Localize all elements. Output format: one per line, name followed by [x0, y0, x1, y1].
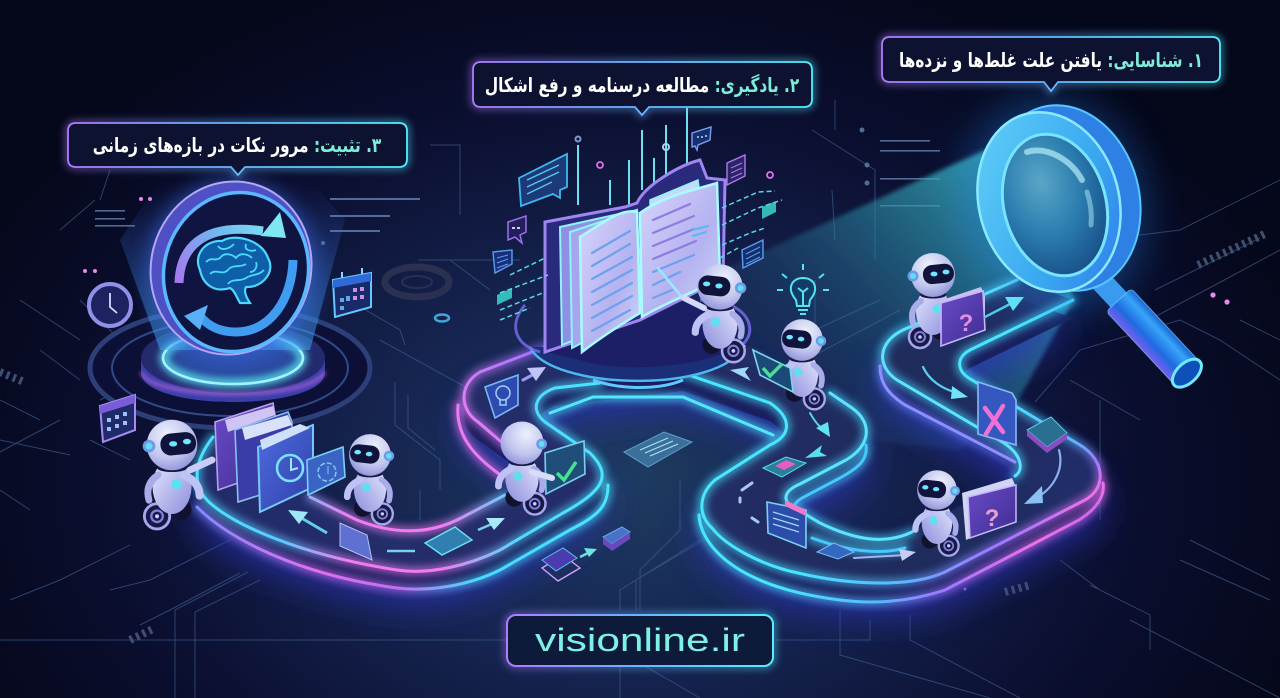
arrow: curved right: [923, 367, 968, 399]
robot far left: [143, 420, 200, 529]
magnifying glass: [940, 77, 1207, 392]
brain icon: [198, 238, 270, 303]
arrow: S mid: [805, 445, 827, 458]
large folder stack with clock: [215, 403, 313, 512]
chat doc purple: [727, 155, 745, 185]
book stage: [516, 300, 750, 388]
disc inner: [146, 176, 326, 368]
platform top: [141, 323, 325, 393]
chat bubble top: [692, 127, 711, 150]
robot with question folder top: [908, 253, 985, 348]
lens highlight: [1027, 150, 1082, 180]
icon: clock: [89, 284, 131, 326]
back-facing robot with check folder: [498, 421, 585, 515]
back cover: [545, 160, 725, 352]
track side face: [197, 298, 1100, 601]
arrow: bottom track: [854, 549, 916, 561]
arrow: near S top: [810, 413, 830, 437]
data stream left: [500, 258, 548, 320]
disc glow: [146, 178, 318, 362]
hill under book: [545, 302, 735, 367]
website badge: [507, 615, 773, 666]
track top face: [197, 280, 1100, 583]
small clock folder: [307, 447, 345, 495]
folder with X: [978, 382, 1016, 445]
robot pointing at the book: [657, 264, 746, 362]
robot with question folder bottom: [915, 470, 1016, 556]
handle: [1088, 269, 1207, 392]
arrow: lightbulb card: [523, 367, 546, 381]
track neon edges: [197, 280, 1103, 602]
circuit nodes: [95, 128, 940, 245]
label 2: [473, 62, 812, 115]
icon: calendar right: [333, 268, 371, 317]
ring front: [958, 96, 1140, 308]
neon platform ring: [163, 332, 303, 384]
card: [425, 527, 472, 555]
dark tech ring: [385, 267, 449, 322]
label 3: ۳. تثبیت: مرور نکات در بازه‌های زمانی: [93, 134, 381, 158]
arrows on right track: [523, 297, 1060, 561]
small robot near folders: [347, 434, 394, 524]
document folder: [767, 500, 806, 548]
arrow: near top robot: [985, 297, 1024, 317]
track glow lines: [197, 280, 1103, 602]
lightbulb card: [485, 375, 518, 418]
website badge: visionline.ir: [535, 622, 745, 658]
stack of cards right: [1027, 417, 1067, 453]
top arrow: [179, 212, 286, 283]
open book: [545, 160, 725, 352]
small folder: [340, 523, 372, 560]
right page text lines: [653, 204, 708, 298]
lower arrow: [184, 260, 293, 332]
chat bubble large: [519, 154, 567, 206]
light beam from magnifier: [690, 150, 1073, 450]
data pins above the book: [576, 108, 773, 205]
lens: [987, 122, 1123, 288]
dashes: [740, 483, 758, 522]
doc card right: [742, 240, 763, 268]
rear pages: [560, 210, 640, 345]
items on left track: [288, 510, 505, 560]
chat bubble purple: [508, 216, 526, 243]
base rings: [530, 345, 745, 381]
neon track: [197, 280, 1103, 613]
ring depth: [971, 88, 1161, 308]
label 3: [68, 123, 407, 175]
arrow: [478, 518, 505, 530]
icon: calendar lower left: [100, 395, 135, 442]
label 1: [882, 37, 1220, 91]
decorative pink dots: [83, 197, 1230, 590]
small card bottom right: [817, 543, 854, 559]
arrow: [288, 510, 327, 533]
small card on track: [763, 457, 806, 477]
robot with question folder bottom: ?: [985, 505, 999, 532]
right page: [640, 183, 720, 317]
data stream right: [720, 191, 782, 258]
platform rings: [90, 308, 370, 428]
robot arm to folder: [190, 460, 212, 470]
disc outer glass: [131, 163, 331, 373]
robot with check folder: [753, 319, 826, 409]
icon: lightbulb: [777, 264, 829, 314]
label 1: ۱. شناسایی: یافتن علت غلط‌ها و نزده‌ها: [899, 49, 1203, 73]
left page: [580, 211, 640, 352]
left page text lines: [592, 231, 632, 331]
arrow: long right curve: [1024, 450, 1060, 504]
label 2: ۲. یادگیری: مطالعه درسنامه و رفع اشکال: [485, 73, 799, 98]
magnifier glow: [940, 77, 1170, 333]
dash: [387, 550, 415, 552]
arrow: robot check: [730, 367, 751, 381]
platform side: [141, 358, 325, 402]
brain hologram: [90, 163, 370, 428]
circular halo: [516, 300, 750, 352]
track ground glow: [197, 310, 1100, 613]
robot with question folder top: ?: [959, 310, 973, 337]
items off track: [542, 527, 630, 581]
doc card left: [493, 250, 512, 273]
floating chat icons around book: [493, 127, 782, 320]
hatch stripes: [0, 233, 1267, 640]
flat document panel: [624, 432, 692, 467]
hologram light cone: [120, 180, 345, 350]
